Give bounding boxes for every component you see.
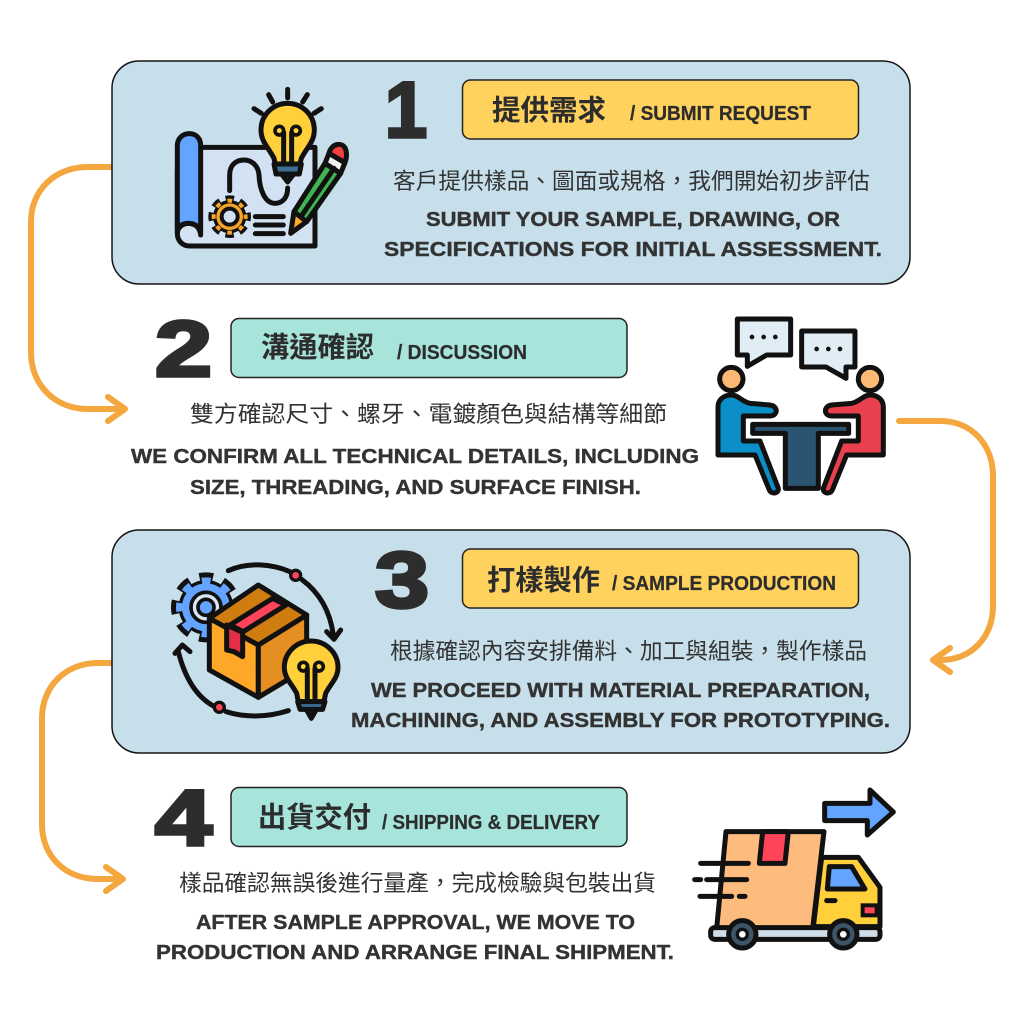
panel background: [112, 61, 910, 284]
panel: step 4 shipping and delivery: [155, 773, 893, 964]
description: English: SPECIFICATIONS FOR INITIAL ASSESSMENT.: [384, 238, 882, 261]
description: English: AFTER SAMPLE APPROVAL, WE MOVE TO: [196, 911, 635, 934]
description: Chinese: 雙方確認尺寸、螺牙、電鍍顏色與結構等細節: [190, 401, 667, 427]
panel background: [112, 530, 910, 753]
heading label: submit request: 提供需求: [492, 95, 606, 127]
description: English: [351, 679, 890, 732]
description: Chinese: 根據確認內容安排備料、加工與組裝，製作樣品: [390, 638, 867, 664]
panel: step 3 sample production: [112, 530, 910, 753]
description: English: [156, 911, 674, 964]
icon: two people talking at a table: [718, 319, 883, 493]
heading label: discussion: / DISCUSSION: [397, 342, 527, 364]
panel: step 2 discussion: [131, 304, 883, 499]
step number 3: 3: [375, 535, 429, 624]
heading label: discussion: 溝通確認: [261, 332, 374, 364]
panel: step 1 submit request: [112, 61, 910, 284]
description: English: WE CONFIRM ALL TECHNICAL DETAILS, INCLUDING: [131, 445, 699, 468]
step number 1: 1: [385, 65, 427, 154]
icon: box with gear, bulb and cycle arrows: [175, 565, 341, 718]
description: English: WE PROCEED WITH MATERIAL PREPARATION,: [371, 679, 870, 702]
heading label: sample production: [462, 549, 858, 608]
heading label: discussion: [231, 318, 627, 378]
step number 2: 2: [155, 304, 212, 393]
description: English: MACHINING, AND ASSEMBLY FOR PROTOTYPING.: [351, 709, 890, 732]
step number 4: 4: [155, 773, 212, 862]
heading label: submit request: / SUBMIT REQUEST: [630, 103, 811, 125]
arrow: step 3 to step 4: [42, 663, 123, 891]
heading label: sample production: / SAMPLE PRODUCTION: [612, 573, 836, 595]
heading label: shipping and delivery: / SHIPPING & DELIVERY: [382, 812, 601, 834]
arrow: step 2 to step 3: [899, 421, 993, 672]
heading label: shipping and delivery: 出貨交付: [258, 802, 371, 834]
heading label: sample production: 打樣製作: [487, 565, 600, 597]
description: Chinese: 樣品確認無誤後進行量產，完成檢驗與包裝出貨: [179, 870, 656, 896]
icon: blueprint with light bulb and pencil: [177, 89, 347, 246]
heading label: submit request: [462, 80, 858, 139]
arrow: step 1 to step 2: [31, 167, 125, 421]
heading label: shipping and delivery: [231, 788, 627, 846]
description: Chinese: 客戶提供樣品、圖面或規格，我們開始初步評估: [393, 168, 870, 194]
description: English: [384, 208, 882, 261]
description: English: SIZE, THREADING, AND SURFACE FINISH.: [190, 476, 641, 499]
description: English: SUBMIT YOUR SAMPLE, DRAWING, OR: [426, 208, 840, 231]
description: English: [131, 445, 699, 499]
description: English: PRODUCTION AND ARRANGE FINAL SHIPMENT.: [156, 941, 674, 964]
icon: delivery truck with arrow: [695, 790, 893, 948]
